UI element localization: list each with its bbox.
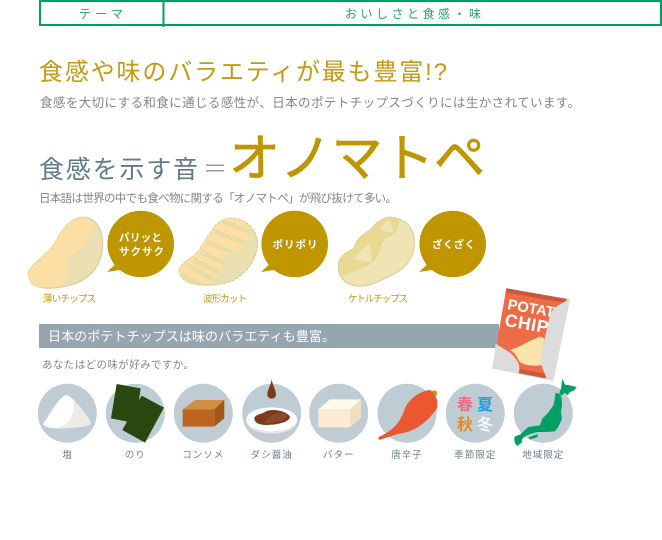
flavor: salt: 塩 [63,449,73,461]
flavor: seasonal: 季節限定 [454,449,496,461]
bubble: zakuzaku [419,211,486,277]
onomatopoeia description: 日本語は世界の中でも食べ物に関する「オノマトペ」が飛び抜けて多い。 [39,191,397,205]
flavor: nori: のり [125,450,146,461]
bubble: poripori: ポリポリ [272,239,318,251]
flavor: butter [309,384,368,461]
flavor: seasonal [446,384,505,461]
banner: 日本のポテトチップスは味のバラエティも豊富。 [48,329,335,344]
flavor: seasonal: 春 [457,395,473,414]
flavor: dashi soy sauce: ダシ醤油 [251,449,293,461]
flavor: nori [106,384,165,461]
flavor: regional [514,379,577,461]
header table: おいしさと食感・味 [345,6,481,21]
title: 食感や味のバラエティが最も豊富!? [39,59,447,86]
heading: onomatopoeia [39,130,485,187]
header table [40,1,661,27]
icon: chip bag: CHIP [503,310,550,337]
flavor: seasonal: 冬 [477,415,493,434]
flavor: dashi soy sauce [242,379,301,461]
chip types [28,211,486,305]
header table: テーマ [79,7,123,21]
bubble: paritto sakusaku [107,211,174,277]
flavor: butter: バター [323,450,354,461]
bubble: zakuzaku: ざくざく [432,238,475,251]
flavor: regional: 地域限定 [522,449,564,461]
flavor: salt [38,384,97,461]
bubble: paritto sakusaku: パリッと [119,232,162,244]
label: wavy cut: 波形カット [203,293,247,305]
banner [39,324,499,348]
bubble: paritto sakusaku: サクサク [119,246,164,258]
label: kettle chip: ケトルチップス [348,294,408,305]
heading: onomatopoeia: オノマトペ [229,130,485,187]
flavor: chili: 唐辛子 [391,449,423,461]
chip: kettle [338,217,414,286]
bubble: poripori [261,211,328,277]
chip: wavy cut [178,218,257,287]
flavor: seasonal: 秋 [457,416,473,434]
flavor: consomme: コンソメ [182,450,224,461]
flavor: chili [378,384,437,461]
question: あなたはどの味が好みですか。 [42,358,194,371]
flavor: seasonal: 夏 [477,396,493,414]
chip: thin [28,217,103,288]
heading: onomatopoeia: 食感を示す音 [39,156,198,184]
subtitle: 食感を大切にする和食に通じる感性が、日本のポテトチップスづくりには生かされています。 [40,95,580,110]
icon: chip bag [492,288,570,381]
flavor: consomme [174,384,233,461]
icon: chip bag: POTAT [506,297,556,321]
label: thin chip: 薄いチップス [43,293,96,305]
